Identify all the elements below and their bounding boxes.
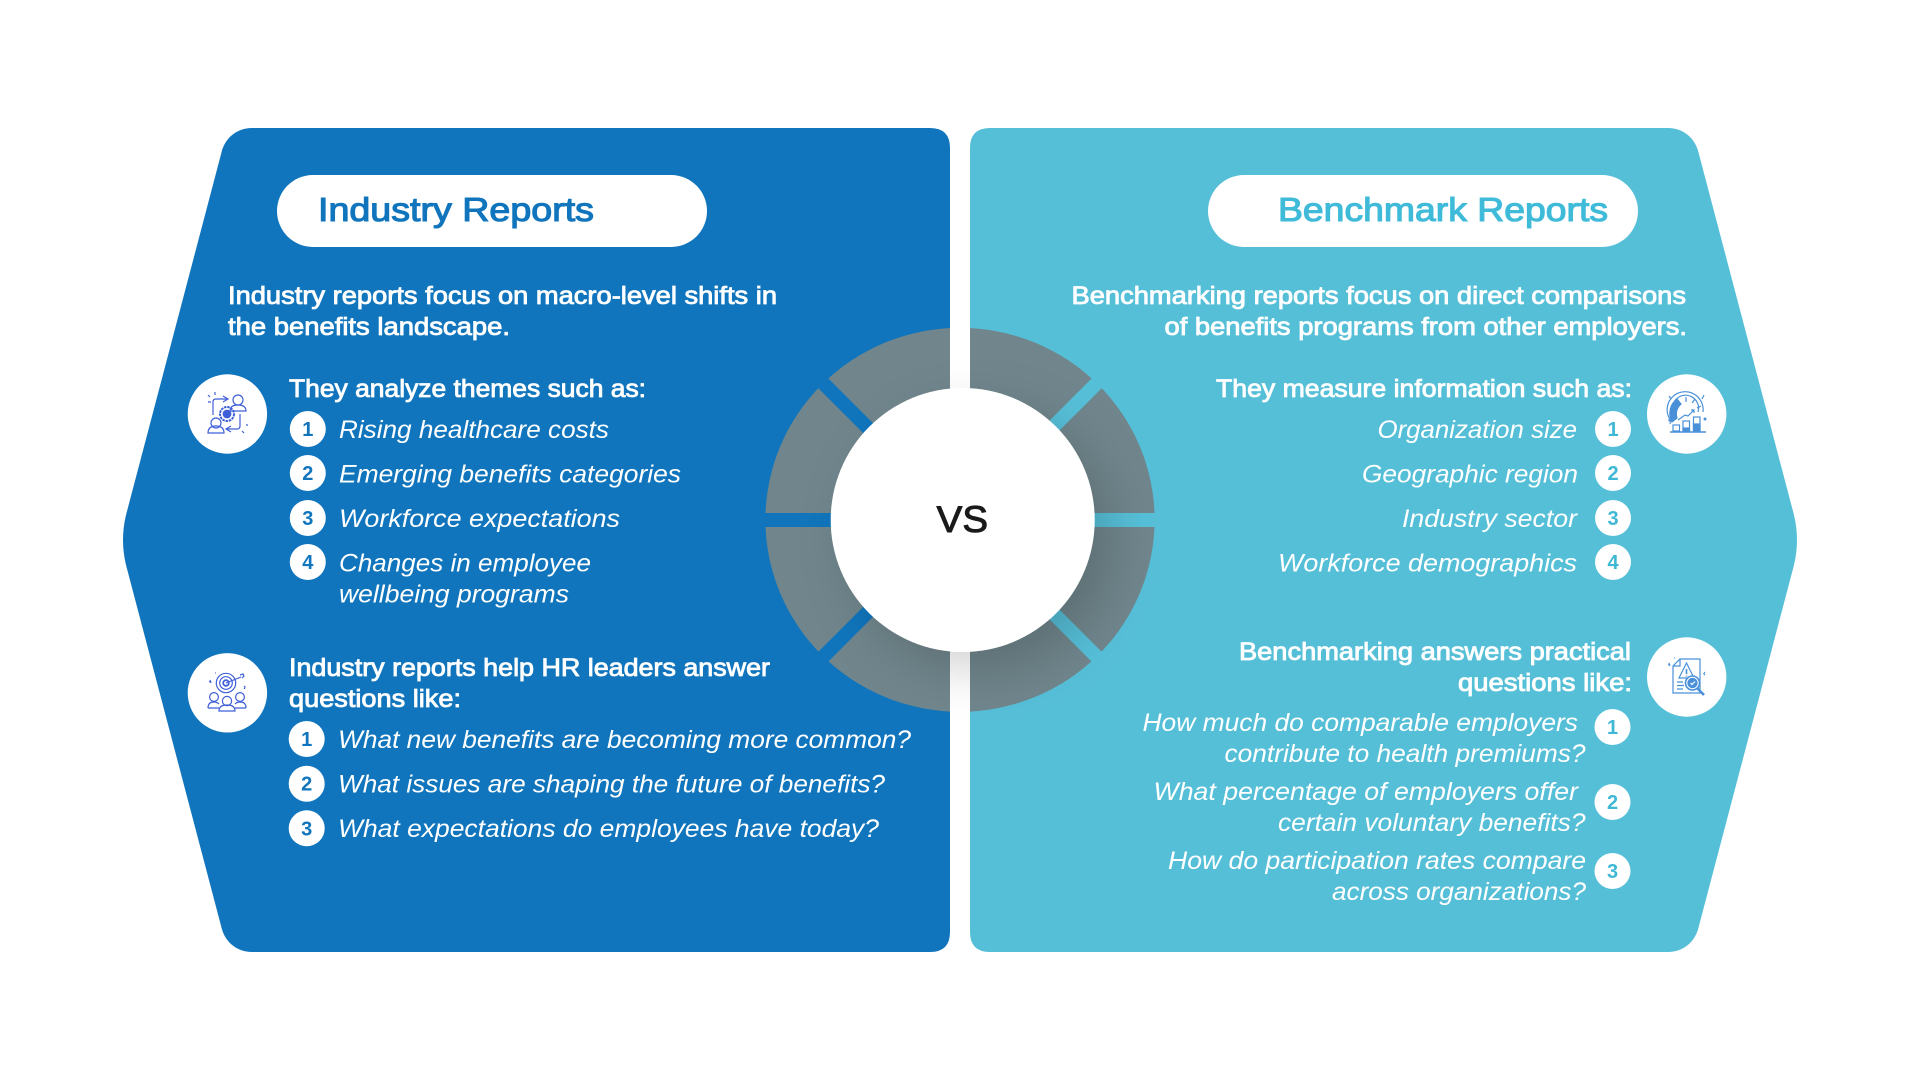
- intro text: Benchmarking reports focus on direct comparisons: [1072, 282, 1686, 310]
- list: practical questions: What percentage of employers offer: [1154, 778, 1580, 806]
- list: questions: 1: [301, 729, 312, 751]
- center circle with VS: [831, 388, 1095, 652]
- subheading: questions: [289, 654, 770, 713]
- list: practical questions: How much do comparable employers: [1142, 709, 1578, 737]
- icon: target with people: [188, 653, 267, 732]
- subheading: questions: Industry reports help HR leaders answer: [289, 654, 770, 682]
- ring: segmented VS wheel: [765, 300, 1156, 740]
- list: themes: 1: [302, 419, 313, 441]
- list: practical questions: How do participation rates compare: [1168, 847, 1586, 875]
- list: practical questions: across organizations?: [1332, 878, 1586, 906]
- panel: industry reports: [123, 128, 950, 952]
- list: themes: wellbeing programs: [339, 580, 569, 608]
- icon: gauge with bars: [1647, 374, 1726, 454]
- list: measures: 4: [1607, 552, 1619, 574]
- list: measures: 1: [1607, 419, 1619, 441]
- list: measures: Organization size: [1378, 416, 1577, 444]
- panel background: left hexagon half: [123, 128, 950, 952]
- list: themes: 3: [302, 508, 313, 530]
- subheading: measures: They measure information such as:: [1216, 375, 1632, 403]
- list: practical questions: certain voluntary benefits?: [1278, 809, 1586, 837]
- heading pill: Industry Reports: [277, 175, 707, 247]
- list: questions: What expectations do employees have today?: [338, 815, 879, 843]
- heading pill: Industry Reports: Industry Reports: [318, 191, 594, 228]
- panel: benchmark reports: [970, 128, 1797, 952]
- list: themes: [290, 411, 681, 608]
- list: practical questions: contribute to health premiums?: [1224, 740, 1586, 768]
- panel background: right hexagon half: [970, 128, 1797, 952]
- list: measures: Geographic region: [1362, 460, 1578, 488]
- center circle with VS: VS: [937, 499, 988, 540]
- intro text: of benefits programs from other employers.: [1164, 313, 1687, 341]
- intro text: the benefits landscape.: [228, 313, 510, 341]
- list: themes: 2: [302, 463, 313, 485]
- list: measures: Industry sector: [1402, 505, 1579, 533]
- list: themes: 4: [302, 552, 314, 574]
- list: themes: Changes in employee: [339, 550, 591, 578]
- subheading: questions: questions like:: [289, 685, 461, 713]
- intro text: [228, 282, 777, 341]
- subheading: practical questions: [1239, 638, 1632, 697]
- list: practical questions: [1142, 709, 1630, 906]
- list: measures: Workforce demographics: [1278, 550, 1577, 578]
- icon: gear with people: [188, 374, 267, 454]
- list: questions: 2: [301, 774, 312, 796]
- heading pill: Benchmark Reports: [1208, 175, 1638, 247]
- list: measures: [1278, 411, 1631, 580]
- list: questions: What new benefits are becoming more common?: [338, 726, 911, 754]
- list: practical questions: 1: [1607, 717, 1618, 739]
- list: measures: 2: [1607, 463, 1619, 485]
- list: questions: [289, 721, 911, 846]
- list: questions: 3: [301, 818, 312, 840]
- icon: document with magnifier: [1647, 637, 1726, 717]
- intro text: [1072, 282, 1687, 341]
- subheading: practical questions: questions like:: [1458, 669, 1632, 697]
- list: themes: Workforce expectations: [339, 505, 620, 533]
- list: measures: 3: [1607, 508, 1619, 530]
- list: practical questions: 3: [1607, 861, 1618, 883]
- subheading: practical questions: Benchmarking answers practical: [1239, 638, 1631, 666]
- heading pill: Benchmark Reports: Benchmark Reports: [1278, 191, 1608, 228]
- intro text: Industry reports focus on macro-level shifts in: [228, 282, 777, 310]
- list: themes: Emerging benefits categories: [339, 460, 681, 488]
- list: practical questions: 2: [1607, 792, 1618, 814]
- list: questions: What issues are shaping the future of benefits?: [338, 770, 885, 798]
- subheading: themes: They analyze themes such as:: [289, 375, 646, 403]
- list: themes: Rising healthcare costs: [339, 416, 609, 444]
